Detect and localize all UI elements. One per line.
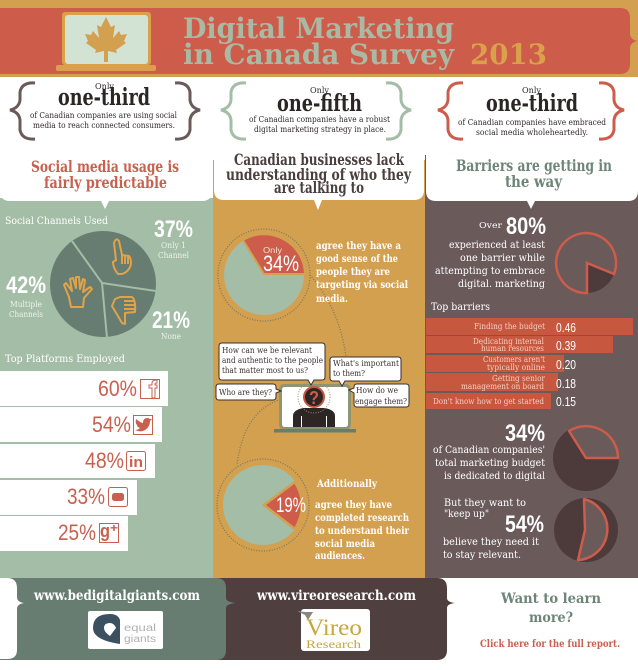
heading: Canadian businesses: Canadian businesses lack <box>234 150 404 169</box>
icon: open hand <box>64 277 92 307</box>
panel: stat one-third social media: Only <box>95 82 114 91</box>
heading: social channels used: Social Channels Used <box>5 216 109 227</box>
text: agree good sense: media. <box>316 293 348 305</box>
text: additionally agree: audiences. <box>315 550 365 562</box>
heading: top platforms employed: Top Platforms Employed <box>5 354 126 365</box>
stat: over 80 percent: 80% <box>506 213 546 240</box>
stat: 54 percent keep up <box>443 497 544 561</box>
header band <box>0 0 638 77</box>
pie chart: 54 percent keep up <box>554 498 618 562</box>
pie chart: 34 percent of budget <box>553 425 619 491</box>
bar chart: top platforms <box>0 371 168 551</box>
bar chart: top barriers: human resources <box>481 344 544 354</box>
left brace <box>10 83 35 139</box>
panel: stat one-third social media: of Canadian companies are using social <box>30 111 177 121</box>
bar: google plus: + <box>110 521 118 535</box>
text: additionally agree: completed research <box>315 512 409 524</box>
text: agree good sense <box>316 240 408 305</box>
stat: over 80 percent: attempting to embrace <box>435 265 545 277</box>
stat: over 80 percent: digital. marketing <box>458 278 545 290</box>
panel: white heading bubbles <box>0 150 638 210</box>
panel: stat one-third social media <box>10 82 200 139</box>
footer panel: digital giants <box>0 578 236 660</box>
heading: Canadian businesses: are talking to <box>274 178 364 197</box>
callout: how can we be relevant <box>219 343 325 385</box>
stat: 34 percent of budget: 34% <box>505 420 545 447</box>
icon: thumbs down <box>112 297 135 324</box>
text: additionally agree: Additionally <box>316 478 378 490</box>
text: additionally agree: social media <box>315 538 375 550</box>
bar chart: top barriers: Dedicating internal <box>473 337 544 347</box>
stat: 54 percent keep up: 54% <box>505 511 544 538</box>
dotted connector curves <box>237 275 346 465</box>
bar chart: top barriers: Customers aren't <box>483 355 545 365</box>
callout: who are they: Who are they? <box>219 388 272 398</box>
footer panel: digital giants: www.bedigitalgiants.com <box>33 588 200 604</box>
panel: stat one-third embraced: one-third <box>486 90 578 117</box>
icon: laptop with person: ? <box>309 388 319 408</box>
pie chart: 19 percent: 19% <box>276 494 306 517</box>
footer panel: vireo research: www.vireoresearch.com <box>256 588 416 604</box>
stat: 42 percent <box>6 272 46 319</box>
stat: 54 percent keep up: "keep up" <box>444 508 489 520</box>
text: agree good sense: targeting via social <box>316 279 408 291</box>
stat: 37 percent: Only 1 <box>161 241 186 250</box>
callout: what's important: What's important <box>333 359 400 369</box>
callout: what's important: to them? <box>333 369 365 379</box>
heading: barriers: the way <box>505 172 563 191</box>
stat: over 80 percent: experienced at least <box>449 239 546 251</box>
stat: 34 percent of budget: is dedicated to digital <box>444 470 546 482</box>
icon: laptop with maple leaf <box>56 12 156 71</box>
text: agree good sense: people they are <box>316 266 390 278</box>
footer: call to action: more? <box>529 610 573 626</box>
heading: Canadian businesses: understanding of who they <box>226 165 412 184</box>
bar: google plus <box>0 516 128 551</box>
panel: stat one-third embraced: social media wholeheartedly. <box>476 128 588 138</box>
text: additionally agree: to understand their <box>315 525 409 537</box>
pie chart: 19 percent <box>217 459 309 551</box>
bar chart: top barriers: management on board <box>461 382 544 392</box>
pie chart: 34 percent: 34% <box>263 251 299 276</box>
bar: twitter: 54% <box>92 412 131 437</box>
bar: twitter <box>0 407 162 442</box>
stat: 54 percent keep up: believe they need it <box>443 536 540 548</box>
title: 2013 <box>470 38 547 71</box>
stat: 21 percent <box>152 307 190 341</box>
callout: how can we be relevant: that matter most to us? <box>222 366 308 376</box>
panel: stat one-third social media: one-third <box>58 84 150 111</box>
bar: linkedin: in <box>129 454 143 471</box>
bar: linkedin <box>0 444 155 478</box>
bar: google plus: 25% <box>58 520 96 545</box>
stat: 34 percent of budget: of Canadian companies' <box>433 444 545 456</box>
stat: 34 percent of budget <box>433 420 546 482</box>
icon: pointing finger <box>113 239 131 274</box>
logo: equal giants: equal <box>124 623 156 634</box>
pie chart: 34 percent: Only <box>263 246 282 255</box>
title: Digital Marketing <box>183 12 454 45</box>
bar chart: top barriers: 0.46 <box>556 320 576 335</box>
logo: vireo research: Vireo <box>306 615 362 640</box>
icon: laptop with person <box>274 381 356 432</box>
panel: stat one-fifth strategy: Only <box>310 86 329 95</box>
logo: equal giants <box>88 611 163 649</box>
footer: call to action <box>480 591 620 650</box>
text: additionally agree: agree they have <box>315 499 392 511</box>
stat: 42 percent: Channels <box>9 310 43 319</box>
stat: 42 percent: 42% <box>6 272 46 299</box>
bar chart: top barriers: 0.18 <box>556 376 576 391</box>
callout: how do we engage them: engage them? <box>355 397 407 407</box>
footer: call to action: Want to learn <box>500 591 601 607</box>
bar chart: top barriers <box>426 318 633 409</box>
pie chart: 80 percent <box>556 233 616 293</box>
stat: 21 percent: None <box>161 332 181 341</box>
stat: 21 percent: 21% <box>152 307 190 334</box>
text: additionally agree <box>315 478 409 562</box>
bar chart: top barriers: typically online <box>487 363 545 373</box>
text: agree good sense: good sense of the <box>316 253 398 265</box>
bar: google plus: g <box>100 521 110 541</box>
stat: 54 percent keep up: to stay relevant. <box>443 549 521 561</box>
callout: how can we be relevant: How can we be relevant <box>222 346 313 356</box>
stat: 42 percent: Multiple <box>10 300 42 309</box>
pie chart: social channels <box>50 231 156 338</box>
panel: stat one-third embraced <box>438 83 624 139</box>
logo: vireo research: Research <box>306 639 361 651</box>
heading: top barriers: Top barriers <box>431 302 490 313</box>
stat: over 80 percent <box>435 213 546 290</box>
stat: 54 percent keep up: But they want to <box>444 497 526 509</box>
pie chart: 34 percent <box>218 229 310 321</box>
callout: how do we engage them <box>349 384 409 407</box>
column backgrounds <box>0 155 638 580</box>
bar: facebook <box>0 371 168 406</box>
heading: barriers <box>456 156 612 191</box>
text: agree good sense: agree they have a <box>316 240 401 252</box>
title <box>183 12 547 71</box>
panel: stat one-fifth strategy: digital marketing strategy in place. <box>254 125 386 135</box>
stat: 34 percent of budget: total marketing budget <box>435 457 546 469</box>
stat: 37 percent: 37% <box>154 216 193 243</box>
heading: social media usage: Social media usage is <box>31 157 179 176</box>
callout: who are they <box>216 384 281 400</box>
bar: youtube: 33% <box>67 484 105 509</box>
logo: vireo research <box>297 609 370 651</box>
bar chart: top barriers: Finding the budget <box>474 322 546 332</box>
bar chart: top barriers: Getting senior <box>492 374 546 384</box>
callout: how can we be relevant: and authentic to the people <box>222 356 323 366</box>
heading: Canadian businesses <box>226 150 412 197</box>
stat: over 80 percent: Over <box>479 221 503 231</box>
callout: what's important <box>330 357 401 386</box>
bar chart: top barriers: 0.39 <box>556 338 576 353</box>
stat: 37 percent: Channel <box>158 251 189 260</box>
panel: stat one-third social media: media to reach connected consumers. <box>33 121 175 131</box>
stat: over 80 percent: one barrier while <box>460 252 545 264</box>
heading: social media usage: fairly predictable <box>44 173 167 192</box>
heading: social media usage <box>31 157 179 192</box>
panel: stat one-fifth strategy: of Canadian companies have a robust <box>249 115 391 125</box>
panel: stat one-fifth strategy <box>221 83 411 139</box>
title: in Canada Survey <box>183 38 455 71</box>
bar chart: top barriers: 0.20 <box>556 357 576 372</box>
footer: white tab <box>0 578 638 670</box>
bar: facebook: 60% <box>98 376 137 401</box>
logo: equal giants: giants <box>124 634 156 645</box>
callout: how do we engage them: How do we <box>356 386 398 396</box>
stat: 37 percent <box>154 216 193 260</box>
bar: linkedin: 48% <box>85 448 124 473</box>
bar chart: top barriers: 0.15 <box>556 394 576 409</box>
bar chart: top barriers: Don't know how to get started <box>433 397 544 407</box>
panel: stat one-third embraced: Only <box>522 86 541 95</box>
panel: stat one-fifth strategy: one-fifth <box>277 90 362 117</box>
footer panel: vireo research <box>215 578 455 660</box>
panel: stat one-third embraced: of Canadian companies have embraced <box>458 118 606 128</box>
bar: youtube <box>0 480 137 515</box>
